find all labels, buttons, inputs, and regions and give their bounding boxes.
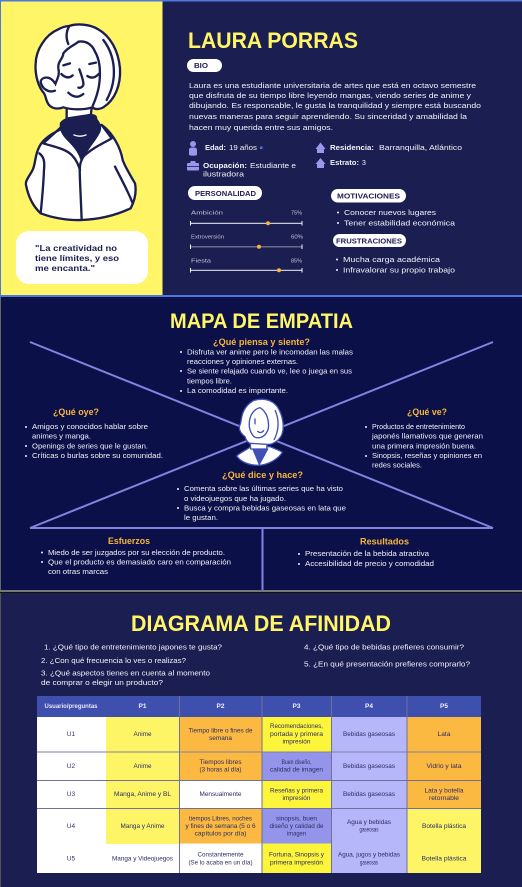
- text: estrato: Estrato:: [330, 160, 359, 167]
- diagram: empathy map lines: [30, 342, 493, 590]
- section: que dice y hace: le gustan.: [184, 515, 218, 522]
- slider: fiesta: 85%: [291, 258, 302, 264]
- slider: ambicion: Ambición: [191, 210, 223, 216]
- panel: yellow portrait column: [1, 2, 162, 295]
- list: motivaciones: Conocer nuevos lugares: [344, 210, 437, 217]
- panel: navy profile column: [162, 2, 522, 295]
- panel: persona: [0, 0, 522, 297]
- slider: ambicion: 75%: [291, 210, 302, 216]
- icon: person: [189, 141, 197, 156]
- row: U4: Agua y bebidas: [347, 819, 391, 826]
- row: U4: gaseosas: [360, 826, 378, 834]
- slider: extroversion: [190, 234, 303, 249]
- section: que ve: una primera impresión buena.: [372, 444, 476, 450]
- text: biography: nuevas maneras para seguir aprendiendo. Su sinceridad y amabilidad la: [189, 114, 467, 121]
- heading: bio pill: BIO: [194, 63, 209, 70]
- section: resultados: [298, 536, 434, 568]
- table header: P2: [217, 703, 225, 710]
- section: que ve: japonés llamativos que generan: [371, 434, 483, 440]
- row: U2: Tiempos libres: [200, 759, 242, 766]
- heading: personalidad pill: PERSONALIDAD: [195, 191, 256, 198]
- row: U3: retornable: [429, 795, 459, 802]
- section: que dice y hace: o videojuegos que ha jugado.: [184, 496, 286, 503]
- row: U4: y fines de semana (5 o 6: [186, 823, 256, 830]
- section: que dice y hace: Comenta sobre las últimas series que ha visto: [184, 486, 343, 493]
- row: U4: U4: [67, 823, 76, 830]
- row: U4: imagen: [287, 830, 306, 838]
- slider: extroversion: 60%: [291, 234, 303, 240]
- row: U3: Mensualmente: [200, 791, 242, 798]
- section: que ve: ¿Qué ve?: [407, 407, 447, 417]
- heading: frustraciones pill: FRUSTRACIONES: [336, 238, 402, 246]
- section: que oye: [25, 407, 163, 460]
- row: U4: sinopsis, buen: [276, 816, 317, 822]
- row: U1: Anime: [134, 731, 152, 738]
- row: U5: gaseosas: [360, 860, 378, 866]
- heading: frustraciones pill: [333, 234, 406, 247]
- section: que ve: Productos de entretenimiento: [372, 424, 465, 431]
- slider: extroversion: Extroversión: [191, 234, 224, 240]
- table header: P3: [293, 703, 301, 710]
- row: U3: Bebidas gaseosas: [343, 791, 395, 798]
- row: U3: U3: [67, 791, 76, 798]
- row: U2: Buen diseño,: [282, 759, 312, 766]
- icon: house estrato: [316, 158, 326, 168]
- row: U2: [67, 759, 462, 774]
- text: questions: 5. ¿En qué presentación prefieres comprarlo?: [304, 662, 470, 668]
- text: questions: [41, 644, 470, 687]
- slider: ambicion: [190, 210, 302, 226]
- list: frustraciones: [336, 257, 455, 274]
- section: que piensa y siente: Se siente relajado cuando ve, lee o juega en sus: [187, 368, 353, 376]
- row: U4: capítulos por día): [194, 830, 246, 838]
- row: U1: Lata: [438, 731, 451, 738]
- text: questions: 3. ¿Qué aspectos tienes en cuenta al momento: [41, 670, 210, 678]
- text: biography: Laura es una estudiante universitaria de artes que está en octavo semestre: [189, 83, 476, 90]
- panel: affinity diagram: [0, 593, 522, 887]
- row: U3: [67, 788, 464, 802]
- table cell fills: [37, 717, 481, 873]
- callout: quote: tiene límites, y eso: [35, 254, 119, 263]
- section: que piensa y siente: ¿Qué piensa y siente?: [213, 337, 310, 347]
- row: U5: (Se lo acaba en un día): [188, 860, 252, 866]
- text: edad: [205, 145, 262, 152]
- section: que ve: redes sociales.: [372, 462, 422, 470]
- panel: empathy map: [0, 297, 522, 593]
- section: que piensa y siente: tiempos libre.: [187, 378, 232, 386]
- text: biography: dibujando. Es responsable, le gusta la tranquilidad y siempre está buscando: [189, 103, 481, 110]
- slider: fiesta: [190, 258, 302, 272]
- row: U3: Reseñas y primera: [270, 788, 323, 794]
- title: name: LAURA PORRAS: [188, 28, 358, 53]
- row: U4: tiempos Libres, noches: [189, 816, 252, 822]
- row: U1: Bebidas gaseosas: [343, 731, 395, 738]
- row: U4: diseño y calidad de: [270, 823, 324, 830]
- section: esfuerzos: [41, 536, 231, 576]
- section: que oye: Amigos y conocidos hablar sobre: [32, 424, 148, 431]
- icon: persona illustration centre: [237, 399, 283, 465]
- row: U5: Fortuna, Sinopsis y: [269, 852, 325, 858]
- heading: motivaciones pill: MOTIVACIONES: [337, 194, 400, 200]
- text: questions: 2. ¿Con qué frecuencia lo ves o realizas?: [41, 658, 186, 665]
- text: edad: 19 años: [229, 145, 258, 152]
- row: U1: Recomendaciones,: [270, 723, 323, 730]
- row: U2: Vidrio y lata: [426, 763, 462, 770]
- list: motivaciones: Tener estabilidad económica: [344, 220, 455, 228]
- section: que dice y hace: Busca y compra bebidas gaseosas en lata que: [184, 506, 346, 512]
- text: ocupacion: [203, 163, 296, 178]
- callout: quote: me encanta.": [35, 264, 95, 273]
- table: affinity: [37, 696, 481, 873]
- row: U5: Botella plástica: [422, 856, 467, 862]
- slider: fiesta: Fiesta: [191, 258, 211, 264]
- row: U2: (3 horas al día): [200, 766, 242, 774]
- text: biography: [189, 83, 481, 132]
- table header: P5: [440, 703, 448, 710]
- table header: Usuario/preguntas: [44, 704, 98, 710]
- section: que oye: Críticas o burlas sobre su comunidad.: [32, 453, 163, 460]
- section: que piensa y siente: reacciones y opiniones externas.: [187, 359, 298, 366]
- table header: P1: [139, 703, 147, 710]
- chart: personality sliders: [190, 210, 303, 272]
- section: esfuerzos: Miedo de ser juzgados por su elección de producto.: [48, 550, 225, 557]
- text: residencia: Barranquilla, Atlántico: [379, 145, 462, 152]
- table header: P4: [365, 703, 373, 710]
- text: edad: Edad:: [205, 145, 226, 152]
- section: que oye: Openings de series que le gustan.: [32, 444, 148, 450]
- title: mapa de empatia: MAPA DE EMPATIA: [170, 310, 353, 333]
- text: ocupacion: Estudiante e: [250, 163, 296, 170]
- row: U1: [67, 723, 451, 746]
- row: U2: Bebidas gaseosas: [343, 763, 395, 770]
- row: U1: portada y primera: [270, 731, 323, 738]
- text: ocupacion: Ocupación:: [203, 163, 247, 170]
- section: esfuerzos: Esfuerzos: [108, 536, 150, 546]
- text: residencia: [330, 145, 462, 152]
- text: biography: hacen muy querida entre sus amigos.: [189, 125, 333, 132]
- text: residencia: Residencia:: [330, 145, 374, 152]
- row: U2: calidad de imagen: [270, 766, 323, 774]
- table header: [37, 696, 481, 717]
- section: que piensa y siente: Disfruta ver anime pero le incomodan las malas: [187, 350, 354, 356]
- row: U4: [67, 816, 466, 838]
- text: biography: que disfruta de su tiempo libre leyendo mangas, viendo series de anime y: [189, 93, 472, 100]
- section: que oye: ¿Qué oye?: [53, 407, 99, 417]
- icon: house residencia: [316, 142, 326, 153]
- section: resultados: Resultados: [360, 536, 409, 546]
- row: U5: [67, 852, 467, 866]
- section: resultados: Presentación de la bebida atractiva: [305, 551, 429, 558]
- section: que dice y hace: ¿Qué dice y hace?: [222, 470, 303, 480]
- text: questions: 4. ¿Qué tipo de bebidas prefieres consumir?: [304, 644, 464, 652]
- text: questions: 1. ¿Qué tipo de entretenimiento japones te gusta?: [44, 644, 222, 652]
- row: U1: U1: [67, 731, 76, 738]
- row: U3: impresión: [282, 795, 311, 802]
- text: questions: de comprar o elegir un producto?: [41, 680, 163, 687]
- row: U2: Anime: [134, 763, 152, 770]
- row: U5: U5: [67, 856, 76, 862]
- section: que piensa y siente: [180, 337, 354, 395]
- text: estrato: 3: [362, 160, 366, 167]
- section: resultados: Accesibilidad de precio y comodidad: [305, 561, 434, 568]
- row: U4: Manga y Anime: [120, 823, 165, 830]
- row: U4: Botella plástica: [422, 823, 466, 830]
- text: ocupacion: ilustradora: [203, 172, 244, 178]
- list: frustraciones: Mucha carga académica: [343, 257, 440, 264]
- section: que ve: Sinopsis, reseñas y opiniones en: [372, 453, 482, 460]
- illustration: Laura portrait: [26, 24, 136, 220]
- row: U5: primera impresión: [270, 860, 323, 866]
- section: que oye: animes y manga.: [32, 434, 91, 440]
- heading: personalidad pill: [188, 186, 262, 200]
- row: U5: Constantemente: [198, 852, 244, 858]
- row: U1: semana: [209, 735, 232, 742]
- icon: briefcase: [187, 161, 199, 170]
- section: que ve: [365, 407, 483, 470]
- row: U2: U2: [67, 763, 76, 770]
- row: U5: Manga y Videojuegos: [112, 856, 173, 862]
- heading: motivaciones pill: [331, 189, 406, 202]
- heading: bio pill: [187, 59, 222, 72]
- row: U1: Tiempo libre o fines de: [188, 728, 253, 734]
- section: esfuerzos: con otras marcas: [48, 569, 109, 576]
- row: U1: impresión: [282, 738, 311, 746]
- row: U5: Agua, jugos y bebidas: [338, 852, 400, 858]
- list: motivaciones: [337, 210, 455, 228]
- section: que piensa y siente: La comodidad es importante.: [187, 388, 288, 395]
- title: diagrama de afinidad: DIAGRAMA DE AFINIDAD: [131, 611, 391, 636]
- section: esfuerzos: Que el producto es demasiado caro en comparación: [48, 560, 231, 566]
- callout: quote: [16, 231, 148, 284]
- section: que dice y hace: [177, 470, 346, 522]
- row: U3: Lata y botella: [424, 788, 464, 794]
- list: frustraciones: Infravalorar su propio trabajo: [343, 268, 455, 274]
- callout: quote: "La creatividad no: [35, 244, 117, 253]
- row: U3: Manga, Anime y BL: [114, 791, 171, 798]
